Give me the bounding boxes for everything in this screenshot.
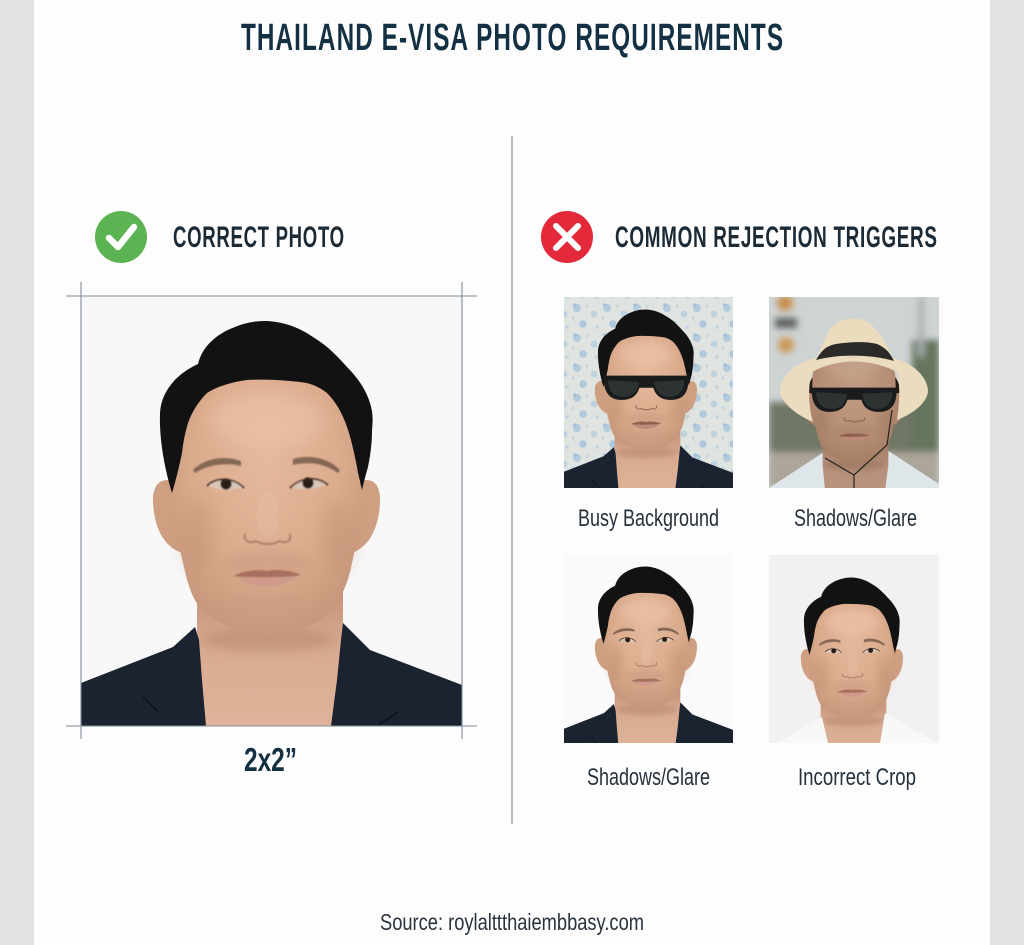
main portrait photo (81, 296, 462, 726)
panel: correct photo (66, 211, 477, 778)
heading: common rejection triggers: COMMON REJECTION TRIGGERS (615, 221, 937, 254)
hat (780, 319, 928, 422)
size label: 2x2” (244, 741, 297, 778)
center divider (511, 136, 513, 824)
photo: shadows glare bottom (564, 566, 733, 743)
photo: incorrect crop (769, 555, 939, 760)
label: shadows glare bottom: Shadows/Glare (587, 764, 710, 791)
photo: busy background (562, 297, 734, 492)
icon: green check (95, 211, 147, 263)
panel: rejection triggers (541, 211, 939, 791)
source line: Source: roylalttthaiembbasy.com (380, 909, 644, 935)
label: incorrect crop: Incorrect Crop (798, 764, 916, 791)
sunglasses (811, 388, 897, 441)
chin cord (825, 410, 892, 488)
shirt (769, 450, 939, 488)
crop guide lines (66, 282, 477, 739)
white shirt (818, 713, 886, 743)
photo: hat and sunglasses (769, 295, 939, 504)
title: THAILAND E-VISA PHOTO REQUIREMENTS (241, 15, 783, 58)
heading: correct photo: CORRECT PHOTO (173, 221, 344, 254)
icon: red cross (541, 211, 593, 263)
label: shadows glare top: Shadows/Glare (794, 505, 917, 532)
shaded hat opening (809, 376, 900, 394)
label: busy background: Busy Background (578, 505, 719, 532)
